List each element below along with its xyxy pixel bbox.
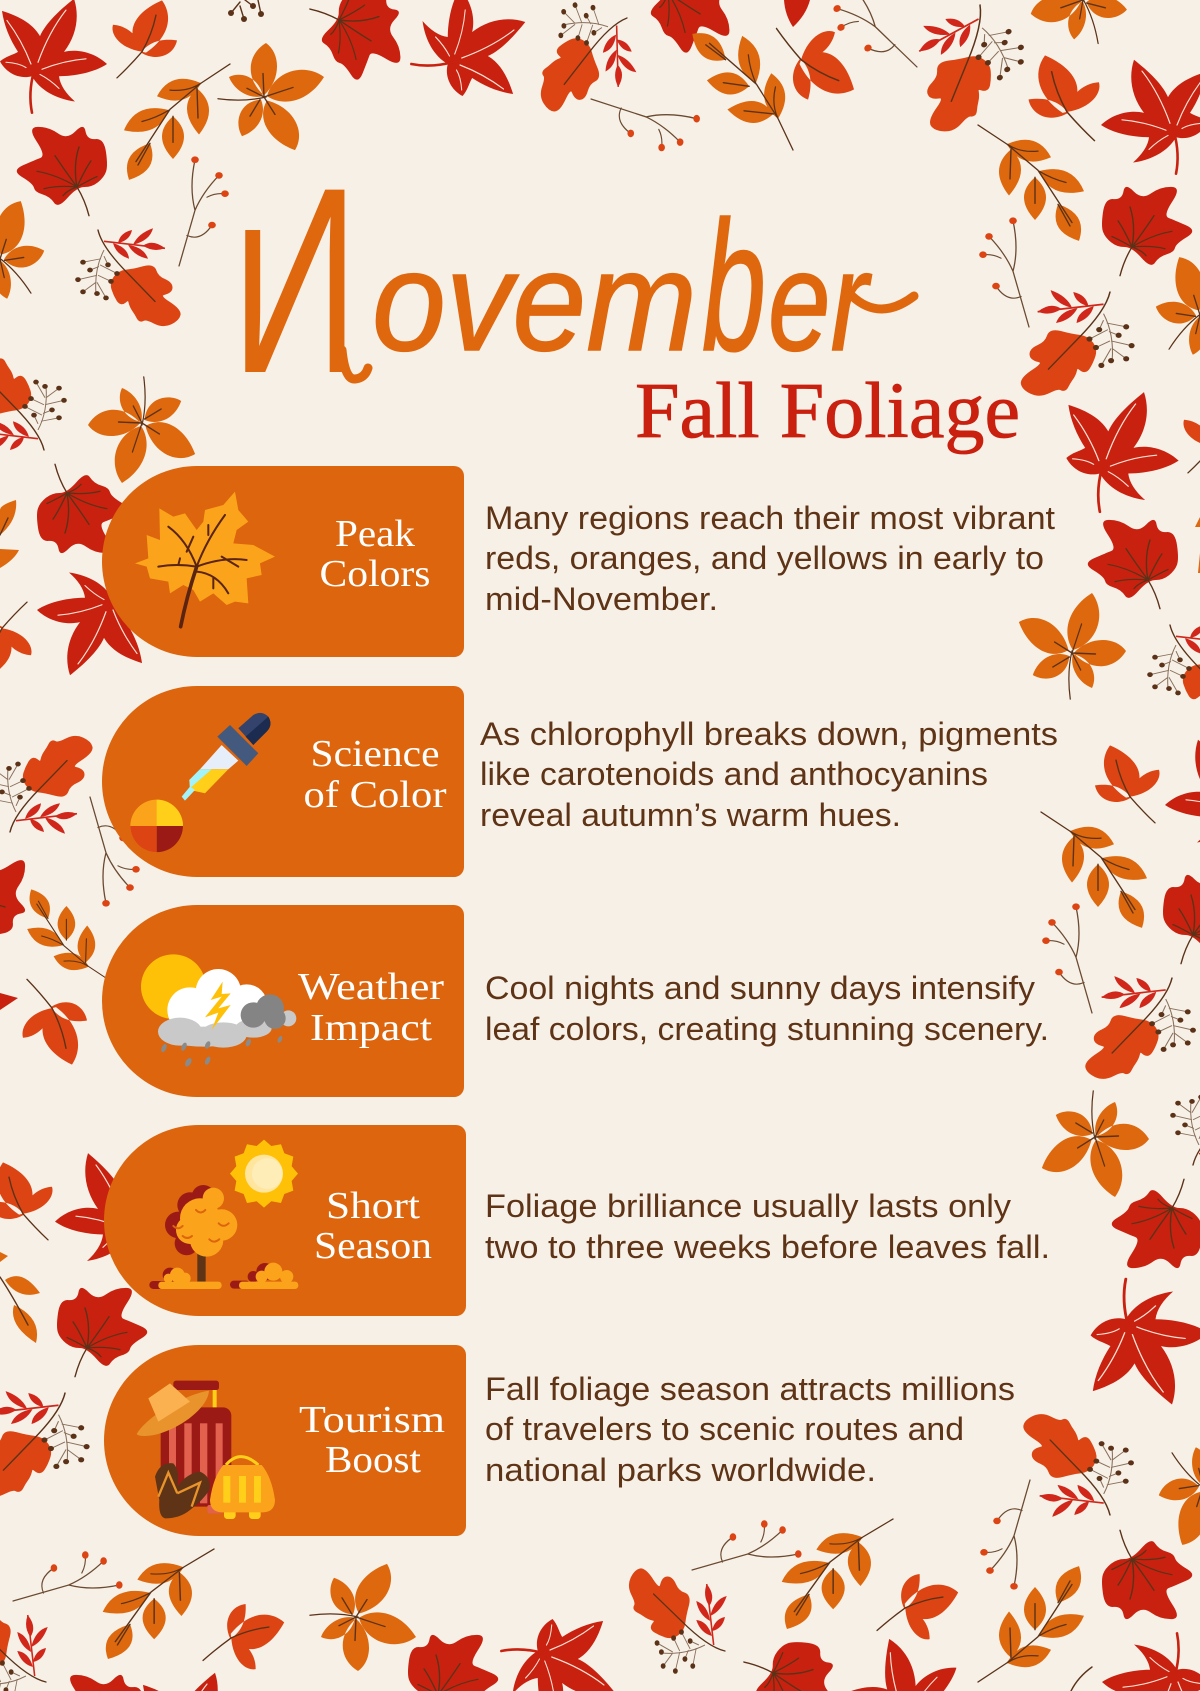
berry twig <box>589 99 701 153</box>
title: ovem <box>372 222 697 381</box>
card <box>104 1345 466 1536</box>
heading: Peak <box>335 513 415 555</box>
berry twig <box>90 797 140 907</box>
oak cluster <box>1147 623 1200 720</box>
oak cluster <box>1170 1070 1200 1167</box>
leaf <box>1133 1417 1200 1567</box>
oak cluster <box>897 0 1042 135</box>
leaf <box>0 602 32 680</box>
oak cluster <box>0 737 91 834</box>
leaf <box>1101 60 1200 174</box>
berry twig <box>692 1520 802 1570</box>
subtitle: Fall Foliage <box>635 368 1020 455</box>
title: N <box>231 132 359 428</box>
description: Many regions reach their most vibrant <box>485 500 1055 536</box>
card <box>102 466 464 657</box>
leaf <box>1014 0 1147 60</box>
leaf <box>1102 1633 1200 1691</box>
icon: luggage, hat and sandals <box>137 1381 275 1519</box>
card <box>102 686 464 877</box>
leaf <box>1102 187 1192 276</box>
oak cluster <box>1022 290 1135 394</box>
leaf <box>1165 740 1200 854</box>
leaf <box>310 1564 416 1671</box>
oak cluster <box>530 0 640 111</box>
description: Fall foliage season attracts millions <box>485 1371 1015 1407</box>
icon: sun and storm cloud <box>141 954 296 1068</box>
title <box>231 132 914 428</box>
heading: Short <box>326 1185 420 1227</box>
leaf <box>0 0 107 113</box>
oak cluster <box>1025 1416 1134 1517</box>
leaf <box>1183 395 1200 473</box>
berry twig <box>979 217 1029 327</box>
oak cluster <box>0 1601 48 1691</box>
panel: weather impact <box>102 905 1049 1097</box>
card <box>102 905 464 1097</box>
description: Foliage brilliance usually lasts only <box>485 1188 1011 1224</box>
branch <box>782 1519 893 1629</box>
berry twig <box>1042 903 1092 1013</box>
card <box>104 1125 466 1316</box>
leaf <box>1088 520 1178 609</box>
leaf <box>1019 593 1126 699</box>
leaf <box>1095 745 1160 823</box>
heading: of Color <box>304 774 447 816</box>
leaf <box>55 1675 145 1691</box>
leaf <box>17 127 107 216</box>
leaf <box>141 1673 248 1691</box>
panel: peak colors <box>102 466 1055 657</box>
oak cluster <box>630 1570 727 1674</box>
branch <box>978 125 1084 241</box>
oak cluster <box>0 355 67 452</box>
leaf <box>0 1162 53 1240</box>
berry twig <box>13 1551 123 1601</box>
leaf <box>37 464 127 553</box>
leaf <box>37 561 144 675</box>
leaf <box>501 1619 615 1691</box>
panel: science of color <box>102 686 1058 877</box>
description: leaf colors, creating stunning scenery. <box>485 1011 1049 1047</box>
branch <box>124 64 230 180</box>
leaf <box>0 845 25 935</box>
leaf <box>1042 1091 1149 1197</box>
berry twig <box>980 1480 1030 1590</box>
berry twig <box>819 0 917 92</box>
leaf <box>55 1153 162 1273</box>
leaf <box>112 0 177 78</box>
description: reveal autumn’s warm hues. <box>480 797 901 833</box>
description: national parks worldwide. <box>485 1452 876 1488</box>
branch <box>103 1549 214 1659</box>
leaf <box>0 179 70 329</box>
icon: dropper and palette <box>130 713 270 852</box>
leaf <box>88 377 195 483</box>
leaf <box>1163 875 1200 964</box>
leaf <box>743 1641 835 1691</box>
heading: Tourism <box>299 1399 445 1441</box>
leaf <box>203 1601 286 1672</box>
leaf <box>218 43 324 150</box>
heading: Weather <box>298 966 444 1008</box>
description: mid-November. <box>485 581 718 617</box>
oak cluster <box>0 1391 90 1495</box>
title: er <box>768 222 873 381</box>
heading: Season <box>314 1225 432 1267</box>
heading: Impact <box>310 1007 432 1049</box>
branch <box>1041 812 1147 928</box>
leaf <box>57 1288 147 1377</box>
title: b <box>702 184 766 390</box>
leaf <box>22 979 87 1065</box>
heading: Colors <box>320 553 430 595</box>
leaf <box>1028 55 1099 141</box>
leaf <box>1112 1179 1200 1268</box>
description: Cool nights and sunny days intensify <box>485 970 1035 1006</box>
heading: Science <box>310 733 440 775</box>
leaf <box>1091 1279 1200 1405</box>
branch <box>27 889 112 982</box>
leaf <box>1130 235 1200 385</box>
branch <box>678 29 808 150</box>
leaf <box>767 24 862 106</box>
description: As chlorophyll breaks down, pigments <box>480 716 1058 752</box>
leaf <box>411 0 525 96</box>
description: of travelers to scenic routes and <box>485 1411 964 1447</box>
leaf <box>309 0 401 81</box>
oak cluster <box>75 228 179 325</box>
panel: tourism boost <box>104 1345 1015 1536</box>
leaf <box>877 1571 960 1642</box>
leaf <box>1102 1530 1192 1619</box>
branch <box>978 1566 1084 1682</box>
description: reds, oranges, and yellows in early to <box>485 540 1044 576</box>
oak cluster <box>1087 976 1196 1077</box>
description: like carotenoids and anthocyanins <box>480 756 988 792</box>
heading: Boost <box>325 1439 421 1481</box>
leaf <box>408 1635 498 1691</box>
icon: sun and autumn tree <box>149 1140 298 1289</box>
leaf <box>832 1618 988 1691</box>
berry twig <box>179 156 229 266</box>
panel: short season <box>104 1125 1050 1316</box>
icon: golden maple leaf <box>135 492 275 627</box>
leaf <box>638 0 730 54</box>
description: two to three weeks before leaves fall. <box>485 1229 1050 1265</box>
leaf <box>1066 392 1179 512</box>
